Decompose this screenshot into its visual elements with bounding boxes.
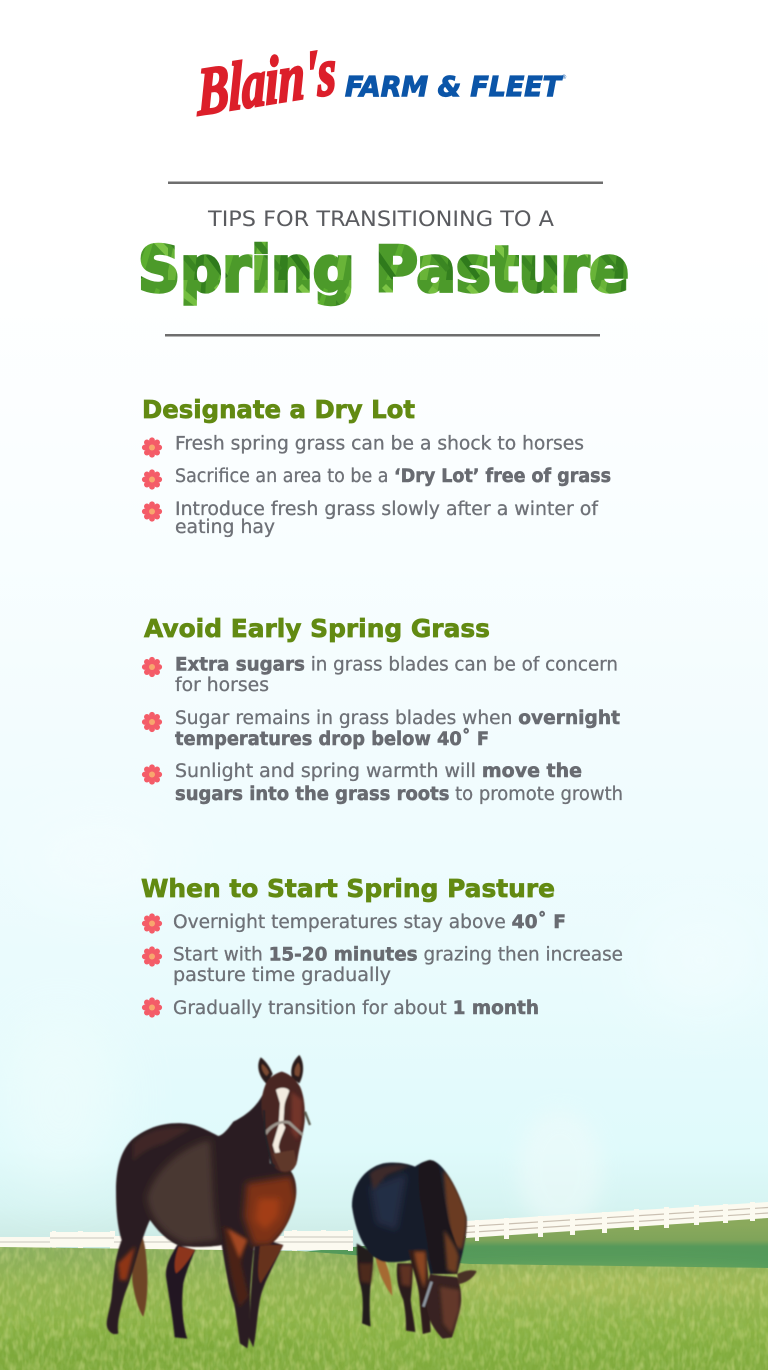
foreleg highlight (223, 1227, 248, 1307)
hip highlight (370, 1165, 410, 1190)
bottom divider (165, 334, 600, 336)
bullet text: Extra sugars in grass blades can be of concern (175, 654, 618, 676)
rear near leg (357, 1243, 373, 1327)
tail (132, 1235, 147, 1317)
far foreleg (248, 1237, 283, 1347)
right flank (443, 1170, 467, 1250)
head (426, 1274, 461, 1339)
body (352, 1160, 467, 1274)
logo: Blain's Farm & Fleet: Blain's (196, 33, 337, 130)
bullet text (173, 911, 623, 1019)
mane and neck (418, 1160, 459, 1274)
bullet text: Gradually transition for about 1 month (173, 998, 539, 1019)
ears (258, 1057, 273, 1084)
barrel highlight (147, 1140, 218, 1243)
bullet text: eating hay (175, 517, 275, 538)
grass meadow (0, 1240, 768, 1370)
hind leg highlight (118, 1247, 135, 1280)
distant hill (300, 1214, 768, 1272)
body shading clipped to outline (118, 1127, 297, 1307)
logo: Blain's Farm & Fleet: FARM & FLEET (345, 70, 563, 103)
bullet text: sugars into the grass roots to promote growth (175, 784, 623, 805)
horse: grazing dark (352, 1160, 477, 1339)
far hind leg (166, 1245, 195, 1339)
horse: standing bay (107, 1055, 310, 1348)
bullet text (175, 654, 623, 805)
title: Spring Pasture in grass texture: Spring Pasture (138, 233, 629, 306)
heading: When to Start Spring Pasture (141, 874, 555, 903)
body shading clipped to outline (370, 1165, 467, 1250)
bullet text: Sunlight and spring warmth will move the (175, 761, 582, 782)
top divider (168, 182, 603, 184)
halter (423, 1282, 432, 1307)
bullet text: pasture time gradually (173, 965, 391, 986)
muzzle (273, 1150, 297, 1171)
bullet text: temperatures drop below 40˚ F (175, 728, 489, 750)
tail (375, 1253, 392, 1296)
bullet text (175, 434, 611, 538)
halter (265, 1121, 303, 1136)
heading: Avoid Early Spring Grass (144, 614, 490, 643)
section: Designate a Dry Lot (142, 395, 611, 538)
bullet text: Overnight temperatures stay above 40˚ F (173, 911, 566, 933)
chest highlight (244, 1176, 297, 1245)
body (107, 1093, 296, 1348)
section: Avoid Early Spring Grass (142, 614, 623, 805)
bullet text: Start with 15-20 minutes grazing then increase (173, 944, 623, 966)
white blaze (273, 1088, 289, 1157)
bullet text: Sacrifice an area to be a ‘Dry Lot’ free of grass (175, 466, 611, 487)
bullet icons (142, 657, 162, 785)
rear far leg (397, 1263, 415, 1332)
title line: tips for transitioning: TIPS FOR TRANSITIONING TO A (207, 207, 554, 232)
croup highlight (133, 1127, 190, 1160)
bullet text: Sugar remains in grass blades when overnight (175, 708, 620, 729)
foreleg (408, 1250, 431, 1334)
logo: Blain's Farm & Fleet (196, 33, 567, 130)
ear (457, 1270, 477, 1284)
bullet icons (142, 437, 162, 522)
heading: Designate a Dry Lot (142, 395, 415, 424)
section: When to Start Spring Pasture (141, 874, 623, 1019)
bullet text: for horses (175, 675, 269, 696)
logo: Blain's Farm & Fleet: ® (561, 74, 567, 81)
bullet text: Fresh spring grass can be a shock to horses (175, 434, 584, 454)
bullet icons (142, 913, 162, 1018)
flank sheen (370, 1173, 407, 1230)
white fence (0, 1202, 768, 1253)
head (262, 1072, 305, 1173)
bullet text: Introduce fresh grass slowly after a winter of (175, 499, 598, 520)
